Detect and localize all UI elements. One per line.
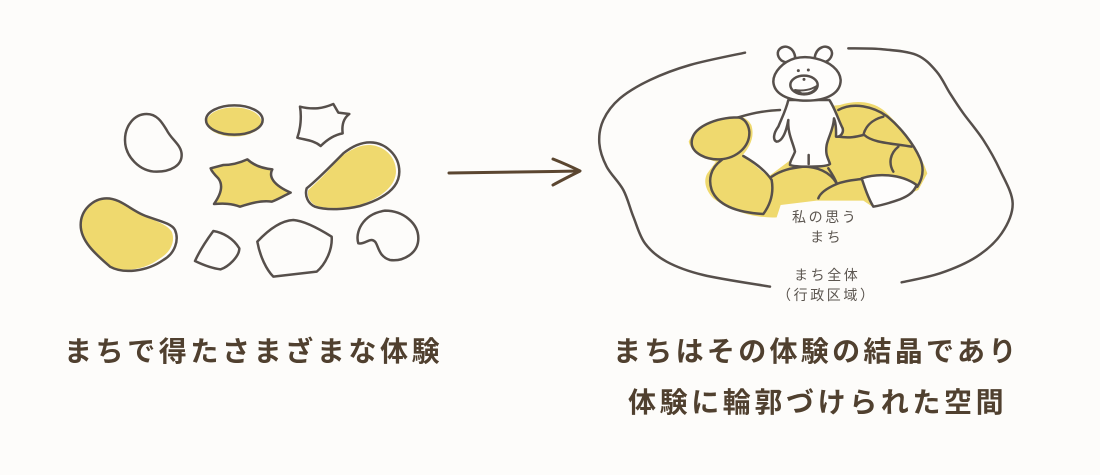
heading: right caption: 体験に輪郭づけられた空間	[628, 387, 1007, 418]
label: my town: 私の思う	[792, 209, 858, 225]
shape: large yellow bean	[81, 198, 177, 271]
label: whole town: まち全体	[794, 267, 860, 283]
outer town boundary	[599, 48, 1013, 287]
shape: yellow ellipse	[206, 105, 263, 137]
arrow	[449, 159, 580, 185]
label: my town: まち	[810, 229, 843, 245]
shape: yellow teardrop	[306, 142, 399, 209]
shape: white notched blob	[358, 211, 418, 260]
my town: yellow patchwork	[689, 102, 927, 217]
label: whole town: （行政区域）	[777, 287, 877, 303]
shape: yellow star	[211, 159, 291, 207]
heading: left caption: まちで得たさまざまな体験	[64, 335, 443, 367]
shape: white bean	[125, 114, 182, 172]
shape: white star	[297, 104, 349, 146]
panel: scattered experience shapes	[81, 104, 418, 277]
icon: bear	[773, 47, 843, 167]
panel: town diagram	[599, 47, 1013, 287]
shape: white pentagon	[257, 220, 332, 277]
shape: small white polygon	[195, 231, 239, 269]
heading: right caption: まちはその体験の結晶であり	[613, 336, 1020, 367]
